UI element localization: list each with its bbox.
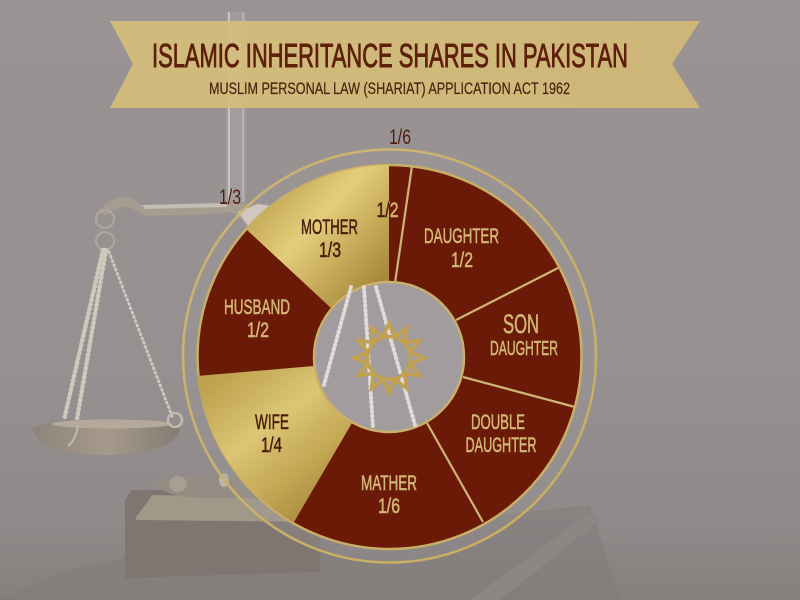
label: mather: MATHER <box>361 472 417 495</box>
label: sliver fraction <box>378 201 398 218</box>
label: daughter <box>424 225 499 272</box>
title banner <box>110 21 700 108</box>
scale beam <box>98 197 270 228</box>
label: wife: WIFE <box>255 411 289 434</box>
fraction label: top 1/6: 1/6 <box>389 126 411 149</box>
label: sliver fraction: 1/2 <box>376 199 398 222</box>
label: husband <box>224 296 290 342</box>
label: mother: 1/3 <box>319 239 341 262</box>
scale chains <box>64 250 172 425</box>
wheel hub <box>314 282 464 432</box>
label: double daughter: DOUBLE <box>471 411 525 434</box>
book and floor shadow <box>0 505 620 600</box>
fraction label: left 1/3: 1/3 <box>219 186 241 209</box>
label: wife <box>255 411 289 457</box>
scale base <box>125 473 320 578</box>
label: son daughter: SON <box>503 309 539 339</box>
label: daughter: DAUGHTER <box>424 225 499 248</box>
label: wife: 1/4 <box>261 434 282 457</box>
outer ring <box>183 150 596 562</box>
scale post <box>226 12 246 202</box>
label: double daughter: DAUGHTER <box>466 434 536 457</box>
share wheel <box>197 165 582 549</box>
segment: wife <box>197 366 352 522</box>
label: sliver fraction: 1/2 <box>376 199 398 222</box>
hub chains <box>324 287 415 428</box>
banner ribbon <box>110 21 700 108</box>
segment: mother <box>247 165 389 308</box>
label: husband: HUSBAND <box>224 296 290 319</box>
subtitle: MUSLIM PERSONAL LAW (SHARIAT) APPLICATION ACT 1962 <box>209 79 570 98</box>
label: son daughter: DAUGHTER <box>490 338 558 360</box>
label: double daughter <box>466 411 536 457</box>
icon: star emblem <box>354 323 424 393</box>
background photo: scales of justice <box>0 12 620 600</box>
label: son daughter <box>490 309 558 360</box>
label: mother: MOTHER <box>301 216 358 239</box>
label: mather <box>361 472 417 518</box>
scale rings <box>96 210 114 250</box>
label: mother <box>301 216 358 262</box>
label: mather: 1/6 <box>378 495 400 518</box>
label: husband: 1/2 <box>247 319 269 342</box>
label: daughter: 1/2 <box>451 249 473 272</box>
scale pan <box>32 413 182 455</box>
segment dividers <box>395 166 575 522</box>
wheel base <box>198 165 582 549</box>
